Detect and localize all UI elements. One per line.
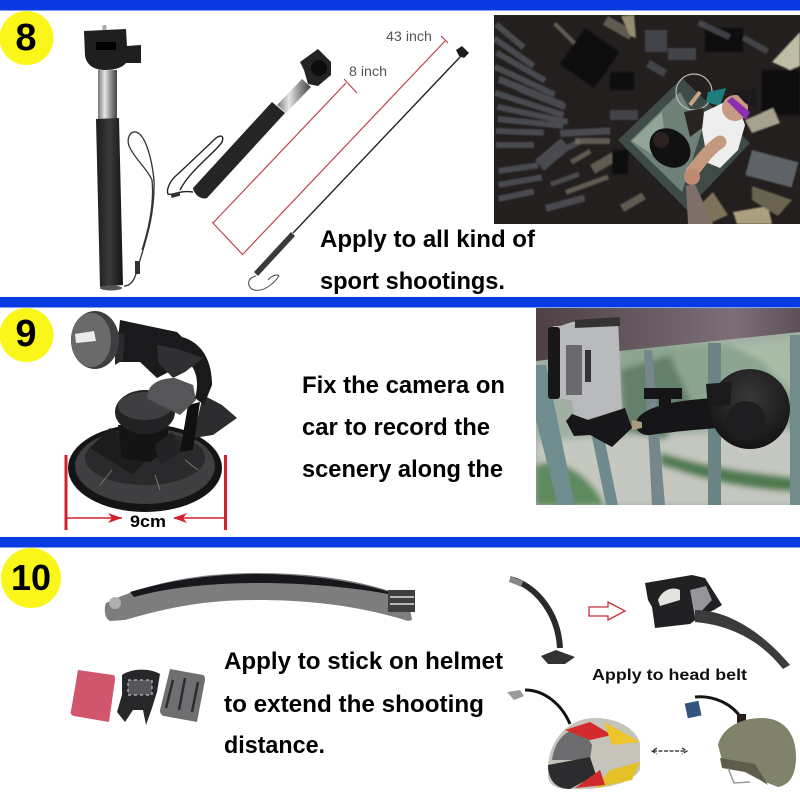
small curved arm with mount bbox=[510, 579, 575, 664]
military helmet with arm bbox=[685, 697, 796, 787]
text: fix the camera on car: Fix the camera on bbox=[302, 372, 505, 399]
dashed double arrow bbox=[652, 748, 687, 754]
selfie stick pole bbox=[686, 184, 713, 224]
rooftop diamond bbox=[618, 78, 750, 210]
panel: item 8 selfie stick bbox=[0, 11, 800, 295]
text: fix the camera on car: scenery along the bbox=[302, 456, 503, 483]
dimension marker 9cm bbox=[66, 455, 226, 531]
number badge 8 bbox=[0, 11, 54, 65]
text: apply to stick on helmet: distance. bbox=[224, 732, 325, 759]
number badge 9 bbox=[0, 308, 54, 362]
collapsed monopod diagonal bbox=[167, 49, 331, 198]
text: apply to all kind of sport shootings bbox=[320, 226, 536, 295]
photo: camera mounted on window bbox=[536, 308, 800, 505]
person in black bbox=[650, 128, 690, 168]
selfie taker bbox=[702, 97, 745, 168]
number badge 8: 8 bbox=[15, 17, 37, 59]
camera mount clamp bbox=[566, 408, 632, 447]
text: fix the camera on car: car to record the bbox=[302, 414, 490, 441]
text: apply to all kind of sport shootings: Apply to all kind of bbox=[320, 226, 536, 253]
text: apply to all kind of sport shootings: sport shootings. bbox=[320, 268, 505, 295]
adhesive pad and buckle mounts bbox=[71, 669, 205, 725]
dimension line 43 inch bbox=[243, 28, 448, 254]
text: apply to stick on helmet: to extend the shooting bbox=[224, 691, 484, 718]
text: apply to stick on helmet: Apply to stick on helmet bbox=[224, 648, 503, 675]
rooftop ring bbox=[676, 74, 712, 110]
label: apply to head belt: Apply to head belt bbox=[592, 667, 748, 684]
label: 9cm: 9cm bbox=[130, 512, 166, 531]
long curved extension arm bbox=[105, 573, 415, 621]
number badge 10: 10 bbox=[11, 557, 51, 598]
red outline arrow bbox=[589, 602, 625, 620]
camera housing bbox=[548, 317, 622, 420]
label: 43 inch: 43 inch bbox=[386, 28, 432, 44]
suction mount product photo bbox=[68, 311, 237, 512]
blue divider bars bbox=[0, 0, 800, 548]
suction cup on glass bbox=[706, 369, 790, 449]
panel: item 10 extension arm bbox=[1, 548, 796, 789]
number badge 9: 9 bbox=[15, 313, 37, 355]
label: 8 inch: 8 inch bbox=[349, 63, 387, 79]
extended monopod bbox=[249, 46, 469, 290]
mount arm bbox=[636, 398, 720, 435]
head belt with arm bbox=[645, 575, 790, 669]
racing helmet with arm bbox=[507, 690, 640, 789]
window beam bbox=[536, 308, 800, 361]
dimension line 8 inch bbox=[212, 63, 387, 255]
text: fix the camera on car bbox=[302, 372, 505, 483]
number badge 10 bbox=[1, 548, 61, 608]
text: apply to stick on helmet bbox=[224, 648, 503, 759]
panel: item 9 suction cup mount bbox=[0, 308, 800, 531]
collapsed monopod upright bbox=[84, 25, 154, 290]
photo: selfie on top of skyscraper bbox=[493, 15, 800, 224]
